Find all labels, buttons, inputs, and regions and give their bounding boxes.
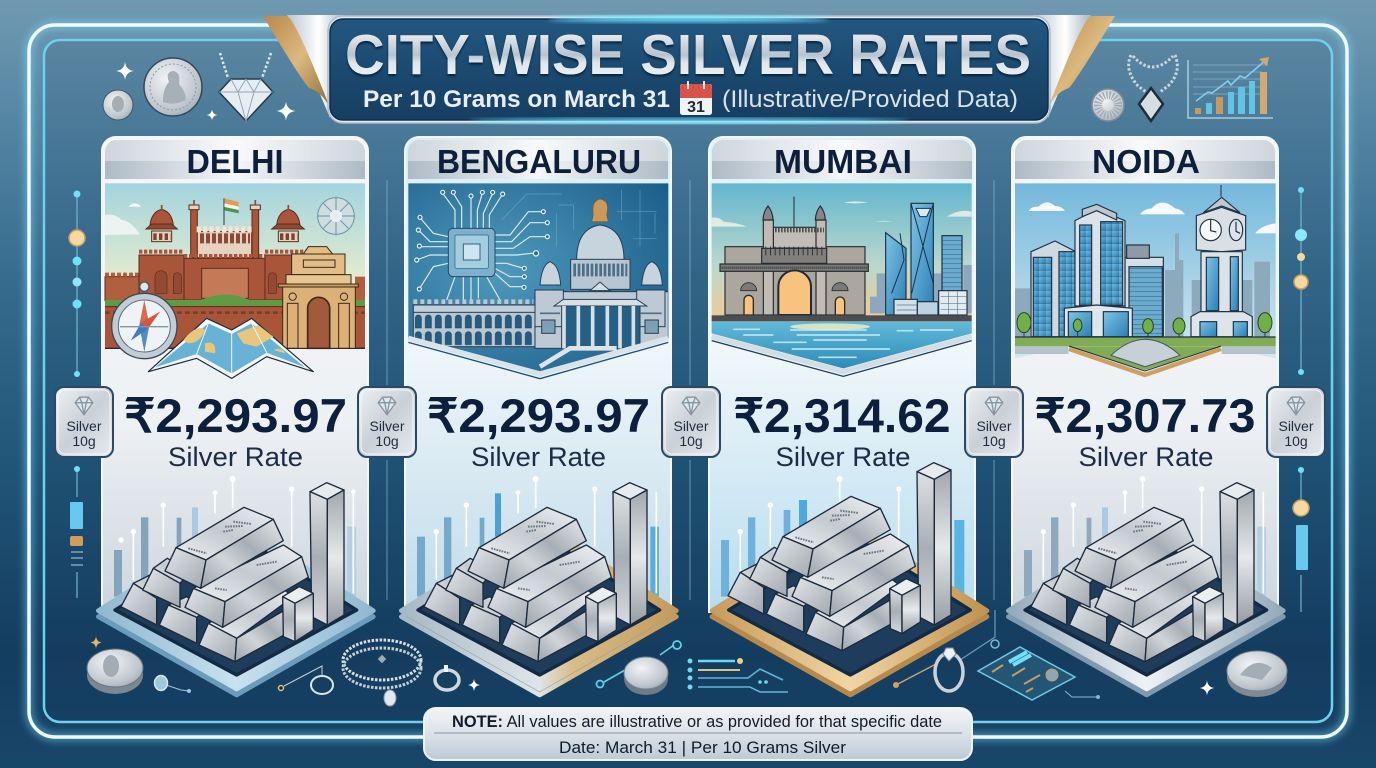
decor: right side connector dots xyxy=(1293,187,1309,612)
icon: gold dot ring connector xyxy=(278,666,333,694)
price: ₹2,293.97 xyxy=(427,389,650,442)
heading: Mumbai: MUMBAI xyxy=(774,143,912,180)
price: ₹2,307.73 xyxy=(1034,389,1256,442)
badge: silver 10g 1: Silver xyxy=(66,418,102,434)
badge: silver 10g 4: Silver xyxy=(976,418,1012,434)
heading: Bengaluru: BENGALURU xyxy=(437,143,641,180)
decor: top left coins and diamond xyxy=(103,53,296,121)
price: ₹2,293.97 xyxy=(124,389,347,442)
icon: solitaire ring xyxy=(893,610,995,691)
platform xyxy=(1008,523,1283,695)
panel: Delhi card xyxy=(98,137,373,695)
panel: Noida card xyxy=(1008,137,1283,695)
illustration: circuit chip and Vidhana Soudha xyxy=(408,183,668,379)
badge: silver 10g 5: 10g xyxy=(1284,433,1308,449)
icon: sparkle xyxy=(1200,680,1214,696)
icon: diamond pendant xyxy=(219,53,273,121)
silver tall bar xyxy=(613,483,647,625)
silver tall bar xyxy=(1220,483,1254,625)
icon: coin xyxy=(1092,89,1124,121)
chart backdrop xyxy=(114,476,356,597)
map xyxy=(148,318,313,378)
card body xyxy=(405,137,671,612)
gateway xyxy=(720,197,868,315)
state emblem xyxy=(592,199,608,222)
subtitle left: Per 10 Grams on March 31 xyxy=(363,86,670,113)
subtitle right: (Illustrative/Provided Data) xyxy=(722,86,1018,113)
heading: Delhi: DELHI xyxy=(186,143,284,180)
icon: silver coin xyxy=(1227,651,1287,697)
note text: NOTE: All values are illustrative or as provided for that specific date xyxy=(452,713,942,731)
heading: Noida: NOIDA xyxy=(1092,143,1200,180)
banner plaque xyxy=(328,16,1050,123)
icon: calendar: 31 xyxy=(687,99,705,116)
illustration: Gateway of India and skyline xyxy=(712,183,972,376)
platform xyxy=(98,523,373,695)
icon: data card xyxy=(978,640,1100,700)
chart: rising bars xyxy=(1188,57,1273,118)
card heading band xyxy=(105,140,365,179)
badge: silver 10g 1: 10g xyxy=(72,433,96,449)
icon: gold sparkle xyxy=(90,636,102,649)
skyscrapers xyxy=(886,203,967,316)
icon: gem with connector xyxy=(154,676,191,693)
banner left wing xyxy=(263,15,345,118)
icon: necklace pendant xyxy=(1129,55,1177,121)
icon: coin xyxy=(624,657,668,695)
date text: Date: March 31 | Per 10 Grams Silver xyxy=(559,739,847,757)
decor: bottom centre circuit and coin xyxy=(596,641,788,695)
title banner xyxy=(263,15,1115,124)
silver bars stack xyxy=(728,496,915,651)
platform xyxy=(712,523,987,695)
card heading band xyxy=(408,140,668,179)
decor: top right coin necklace chart xyxy=(1092,55,1273,121)
illustration: Red Fort, India Gate, compass and map xyxy=(105,183,365,378)
chip xyxy=(448,228,495,277)
platform xyxy=(401,523,676,695)
circuit traces xyxy=(417,193,547,300)
note box xyxy=(424,708,972,760)
chart backdrop xyxy=(721,476,964,597)
icon: circuit lines xyxy=(688,658,788,692)
banner right wing xyxy=(1033,15,1115,118)
silver tall bar xyxy=(917,463,951,625)
panel: Bengaluru card xyxy=(401,137,676,695)
card body xyxy=(102,137,368,612)
card body xyxy=(709,137,975,612)
trees xyxy=(1017,313,1272,337)
badge: silver 10g 2: Silver xyxy=(369,418,405,434)
badge: silver 10g 3: Silver xyxy=(673,418,709,434)
silver small block xyxy=(890,579,920,634)
towers xyxy=(139,205,310,300)
price: ₹2,314.62 xyxy=(734,389,950,442)
left wall xyxy=(105,277,140,301)
decor: left side connector dots xyxy=(69,190,85,598)
rate label: Silver Rate xyxy=(168,442,303,472)
icon: stacked coin xyxy=(87,649,143,694)
badge: silver 10g 1 xyxy=(55,387,113,457)
compass xyxy=(112,282,177,359)
silver tall bar xyxy=(310,483,344,625)
icon: large coin xyxy=(144,58,202,116)
badge: silver 10g 5 xyxy=(1267,387,1325,457)
rate label: Silver Rate xyxy=(1078,442,1214,472)
badge: silver 10g 4 xyxy=(965,387,1023,457)
silver small block xyxy=(586,587,616,642)
garden and lower wall xyxy=(105,300,365,307)
badge: silver 10g 5: Silver xyxy=(1278,418,1314,434)
icon: calendar xyxy=(680,81,712,116)
card heading band xyxy=(712,140,972,179)
silver bars stack xyxy=(424,507,611,662)
icon: diamond necklace xyxy=(343,640,421,706)
silver small block xyxy=(283,587,313,642)
chart backdrop xyxy=(417,476,659,597)
rate label: Silver Rate xyxy=(776,442,910,472)
decor: bottom left jewellery xyxy=(87,636,480,706)
rate label: Silver Rate xyxy=(471,442,606,472)
towers xyxy=(1031,204,1163,337)
card body xyxy=(1012,137,1278,612)
card heading band xyxy=(1015,140,1275,179)
clock tower xyxy=(1191,185,1252,337)
silver bars stack xyxy=(121,507,308,662)
decor: bottom right ring card coin xyxy=(893,610,1287,700)
main title: CITY-WISE SILVER RATES xyxy=(345,23,1031,87)
icon: silver ring xyxy=(435,665,459,690)
illustration: office towers and clock tower xyxy=(1015,183,1276,377)
icon: small coin xyxy=(103,90,133,120)
icon: sparkle xyxy=(468,679,480,691)
panel: Mumbai card xyxy=(709,137,987,695)
silver small block xyxy=(1193,587,1223,642)
icon: sparkles xyxy=(116,62,296,120)
India Gate xyxy=(278,247,358,348)
sea xyxy=(712,315,972,321)
plaza xyxy=(1015,337,1276,346)
badge: silver 10g 2: 10g xyxy=(375,433,399,449)
chart backdrop xyxy=(1024,476,1266,597)
assembly building xyxy=(413,225,668,367)
badge: silver 10g 3: 10g xyxy=(679,433,703,449)
badge: silver 10g 4: 10g xyxy=(982,433,1006,449)
badge: silver 10g 3 xyxy=(662,387,720,457)
decor: connectors between cards xyxy=(387,180,994,600)
silver bars stack xyxy=(1031,507,1218,662)
badge: silver 10g 2 xyxy=(358,387,416,457)
